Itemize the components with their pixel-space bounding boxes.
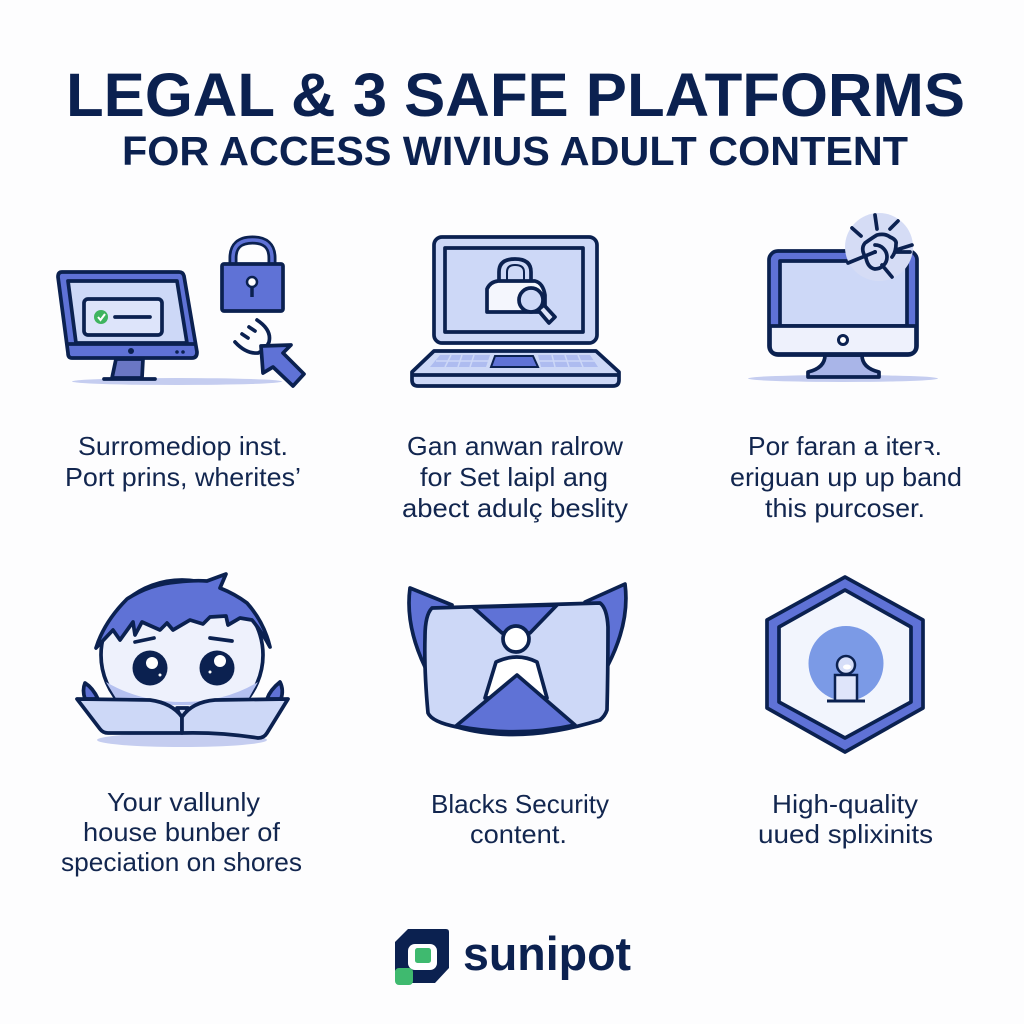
text: caption 6: High-quality [772, 789, 918, 819]
title: LEGAL & 3 SAFE PLATFORMS [66, 61, 965, 129]
logo [395, 927, 631, 985]
text: caption 5: content. [470, 819, 567, 849]
icon: eared shield with figure [409, 584, 626, 735]
text: caption 2: for Set laipl ang [420, 462, 608, 492]
text: caption 3: Por faran a iterꝛ. [748, 431, 942, 461]
icon: monitor with lock and cursor [58, 240, 304, 386]
icon: hexagon badge with person [767, 577, 923, 752]
text: caption 3: eriguan up up band [730, 462, 962, 492]
panel: login monitor [58, 240, 304, 492]
text: caption 4 [61, 787, 302, 877]
icon: logo mark [395, 929, 449, 985]
panel: laptop [402, 237, 628, 523]
text: caption 1: Surromediop inst. [78, 431, 288, 461]
text: caption 1: Port prins, wherites’ [65, 462, 301, 492]
text: caption 5: Blacks Security [431, 789, 609, 819]
text: caption 5 [431, 789, 609, 849]
title [66, 61, 965, 174]
panel: peeking character [61, 574, 302, 877]
text: wordmark: sunipot [463, 927, 631, 980]
icon: desktop monitor with burst [748, 213, 938, 382]
text: caption 2: Gan anwan ralrow [407, 431, 623, 461]
icon: laptop with lock and magnifier [412, 237, 619, 386]
text: caption 6: uued splixinits [758, 819, 933, 849]
text: caption 3 [730, 431, 962, 523]
title: FOR ACCESS WIVIUS ADULT CONTENT [122, 128, 908, 174]
text: caption 1 [65, 431, 301, 492]
panel: desktop [730, 213, 962, 523]
icon: character peeking over book [77, 574, 288, 747]
panel: quality badge [758, 577, 933, 849]
text: caption 2: abect adulç beslity [402, 493, 628, 523]
text: caption 4: Your vallunly [107, 787, 260, 817]
text: caption 4: speciation on shores [61, 847, 302, 877]
text: caption 2 [402, 431, 628, 523]
panel: security mask [409, 584, 626, 849]
text: caption 3: this purcoser. [765, 493, 925, 523]
text: caption 4: house bunber of [83, 817, 281, 847]
text: caption 6 [758, 789, 933, 849]
